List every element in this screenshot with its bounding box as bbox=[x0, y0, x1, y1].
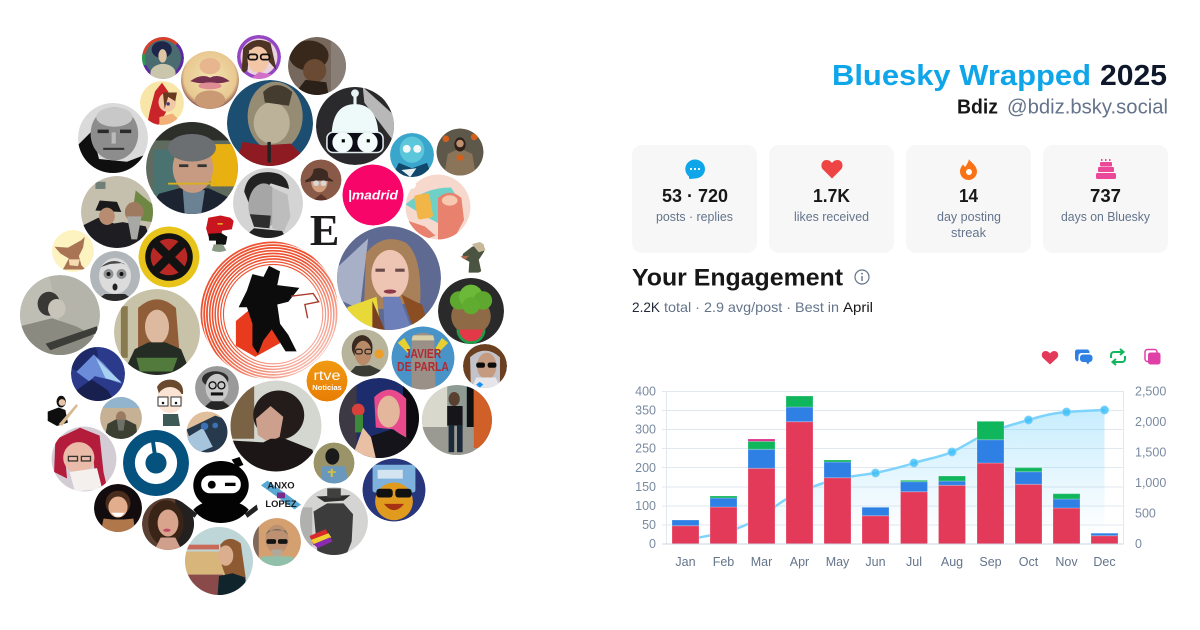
icon: info bbox=[855, 270, 869, 284]
avatar: cowboy from behind bbox=[300, 487, 368, 555]
avatar: dark painted self-portrait bbox=[288, 37, 348, 95]
avatar: broccoli head with watermelon bbox=[438, 278, 504, 344]
avatar: woman with guitar in grayscale bbox=[20, 275, 100, 355]
avatar: brunette woman bbox=[142, 498, 194, 550]
text: engagement summary: April bbox=[843, 299, 873, 315]
avatar: long-haired man in green shirt bbox=[114, 289, 200, 375]
avatar: woman pulling funny face bbox=[94, 484, 142, 532]
stat label: posts · replies bbox=[656, 210, 733, 224]
right axis labels: 500 bbox=[1135, 506, 1156, 520]
icon: quotes bbox=[1145, 350, 1160, 364]
text: user name and handle: @bdiz.bsky.social bbox=[1007, 96, 1168, 118]
avatar: dinosaur sticker bbox=[460, 241, 486, 273]
avatar: rtve Noticias logo bbox=[306, 360, 348, 402]
avatar: Darth Vader with blue shirt bbox=[314, 442, 354, 484]
avatar: eevee cartoon bbox=[52, 230, 94, 272]
avatar: gray kid with big eyes bbox=[90, 251, 140, 301]
stat label bbox=[937, 210, 1001, 240]
avatar: Anxo Lopez logo: LOPEZ bbox=[265, 499, 297, 510]
title: Bluesky Wrapped 2025: Bluesky Wrapped bbox=[832, 60, 1091, 92]
heading: Your Engagement: Your Engagement bbox=[632, 264, 843, 292]
avatar: cartoon man with glasses bbox=[157, 380, 183, 426]
line: cumulative engagement bbox=[686, 410, 1104, 540]
avatar: woman in yellow coat bbox=[337, 226, 441, 330]
avatar: woman on sunny balcony bbox=[185, 527, 253, 595]
month labels: Sep bbox=[979, 555, 1002, 569]
left axis labels: 150 bbox=[635, 480, 656, 494]
right axis labels: 1,500 bbox=[1135, 446, 1166, 460]
avatar: pink-haired woman peace sign bbox=[339, 378, 419, 458]
avatar: black and white older man bbox=[78, 103, 148, 173]
icon: birthday cake bbox=[1096, 159, 1116, 179]
avatar: red riding hood cartoon bbox=[140, 81, 184, 125]
right axis labels: 0 bbox=[1135, 537, 1142, 551]
avatar: musician sticker bbox=[48, 396, 78, 426]
avatar: rtve Noticias logo: Noticias bbox=[312, 383, 342, 392]
avatar: red-haired woman with mug bbox=[52, 426, 116, 492]
avatar: red spiral poster with black figure bbox=[200, 241, 345, 386]
month labels: Nov bbox=[1055, 555, 1078, 569]
panel: days on Bluesky card bbox=[1043, 145, 1168, 253]
avatar: madrid logo: |madrid bbox=[348, 187, 399, 202]
avatar: man in punisher shirt bbox=[422, 385, 492, 455]
icon: replies bbox=[1075, 350, 1092, 364]
avatar: blue cartoon character bbox=[390, 133, 434, 177]
area: cumulative engagement bbox=[686, 410, 1104, 544]
avatar: rtve Noticias logo: rtve bbox=[313, 367, 341, 383]
avatar: Javier de Parla badge: JAVIER bbox=[405, 347, 441, 361]
month labels: Jan bbox=[675, 555, 696, 569]
month labels: Jun bbox=[865, 555, 886, 569]
month labels: Dec bbox=[1093, 555, 1116, 569]
avatar: man with pencil moustache bbox=[146, 122, 238, 214]
panel: avatar bubble cluster bbox=[20, 35, 507, 595]
left axis labels: 350 bbox=[635, 404, 656, 418]
avatar: Groucho Marx bbox=[195, 366, 239, 410]
avatar: E newspaper logo: E bbox=[310, 206, 339, 255]
month labels: Aug bbox=[941, 555, 963, 569]
avatar: smiling man with sunglasses bbox=[253, 518, 301, 566]
month labels: Oct bbox=[1019, 555, 1039, 569]
right axis labels bbox=[1135, 384, 1166, 551]
left axis labels: 400 bbox=[635, 384, 656, 398]
title: Bluesky Wrapped 2025: 2025 bbox=[1100, 60, 1167, 92]
stacked bars bbox=[672, 396, 1118, 544]
stat value: 14 bbox=[959, 186, 978, 206]
panel: posts and replies card bbox=[632, 145, 757, 253]
left axis labels: 0 bbox=[649, 537, 656, 551]
avatar: otter with phone bbox=[406, 174, 470, 240]
avatar: blue fantasy elf bbox=[71, 347, 125, 401]
avatar: blue ring logo bbox=[123, 430, 189, 496]
avatar: cookie with sunglasses bbox=[362, 458, 426, 522]
month labels: Jul bbox=[906, 555, 922, 569]
avatar: woman with hat and glasses bbox=[300, 160, 342, 200]
icon: like bbox=[1042, 351, 1058, 364]
avatar: woman with curly dark hair bbox=[230, 380, 322, 472]
avatar: Anxo Lopez logo: ANXO bbox=[267, 481, 295, 492]
chart: monthly engagement stacked bars with cumulative line bbox=[635, 384, 1166, 569]
month labels bbox=[675, 555, 1116, 569]
text: user name and handle: Bdiz bbox=[957, 96, 998, 118]
avatar: sleeping doll girl painting bbox=[227, 80, 313, 166]
avatar: bearded man with oranges bbox=[436, 128, 484, 176]
panel: day posting streak card bbox=[906, 145, 1031, 253]
month labels: Feb bbox=[713, 555, 734, 569]
icon: chat bubble bbox=[685, 159, 705, 179]
avatar: two men with hats bbox=[81, 176, 153, 248]
line points bbox=[872, 406, 1108, 477]
left axis labels: 100 bbox=[635, 499, 656, 513]
stat value: 53 · 720 bbox=[662, 186, 728, 206]
avatar: purple ring cartoon bbox=[237, 35, 281, 79]
avatar: Hellboy figure bbox=[206, 216, 234, 252]
right axis labels: 2,000 bbox=[1135, 415, 1166, 429]
stat value: 1.7K bbox=[813, 186, 850, 206]
avatar: man with glasses portrait bbox=[342, 330, 388, 376]
avatar: man covering half of face bbox=[233, 168, 303, 238]
avatar: jeans and shoes bbox=[186, 412, 228, 452]
avatar: X-Men logo bbox=[138, 226, 200, 288]
month labels: May bbox=[826, 555, 850, 569]
stat label: streak bbox=[951, 226, 987, 240]
avatar: man with sunglasses bbox=[463, 344, 507, 388]
avatar: moustache close-up bbox=[181, 51, 239, 109]
avatar: ninja logo bbox=[184, 457, 258, 523]
stat value: 737 bbox=[1090, 186, 1121, 206]
right axis labels: 2,500 bbox=[1135, 384, 1166, 398]
right axis labels: 1,000 bbox=[1135, 476, 1166, 490]
stat label: likes received bbox=[794, 210, 869, 224]
avatar: bearded man outdoors bbox=[100, 397, 142, 439]
left axis labels: 250 bbox=[635, 442, 656, 456]
icon: heart bbox=[821, 160, 843, 178]
avatar: madrid logo bbox=[342, 164, 404, 226]
avatar: Anxo Lopez logo bbox=[261, 481, 301, 510]
left axis labels: 50 bbox=[642, 518, 656, 532]
text: engagement summary: 2.2K bbox=[632, 299, 661, 315]
avatar: Javier de Parla badge bbox=[392, 326, 454, 390]
month labels: Apr bbox=[790, 555, 809, 569]
left axis labels: 300 bbox=[635, 422, 656, 436]
left axis labels bbox=[635, 384, 656, 551]
left axis labels: 200 bbox=[635, 461, 656, 475]
stat label: days on Bluesky bbox=[1061, 210, 1151, 224]
month labels: Mar bbox=[751, 555, 772, 569]
avatar: rainbow ring portrait bbox=[142, 37, 184, 82]
stat label: day posting bbox=[937, 210, 1001, 224]
avatar: Javier de Parla badge: DE PARLA bbox=[397, 360, 449, 374]
avatar: Bender robot bbox=[316, 87, 394, 165]
chart legend icons bbox=[1042, 349, 1160, 365]
panel: likes received card bbox=[769, 145, 894, 253]
icon: flame bbox=[960, 159, 977, 180]
icon: reposts bbox=[1111, 349, 1125, 365]
text: engagement summary: total · 2.9 avg/post · Best in bbox=[664, 299, 839, 315]
